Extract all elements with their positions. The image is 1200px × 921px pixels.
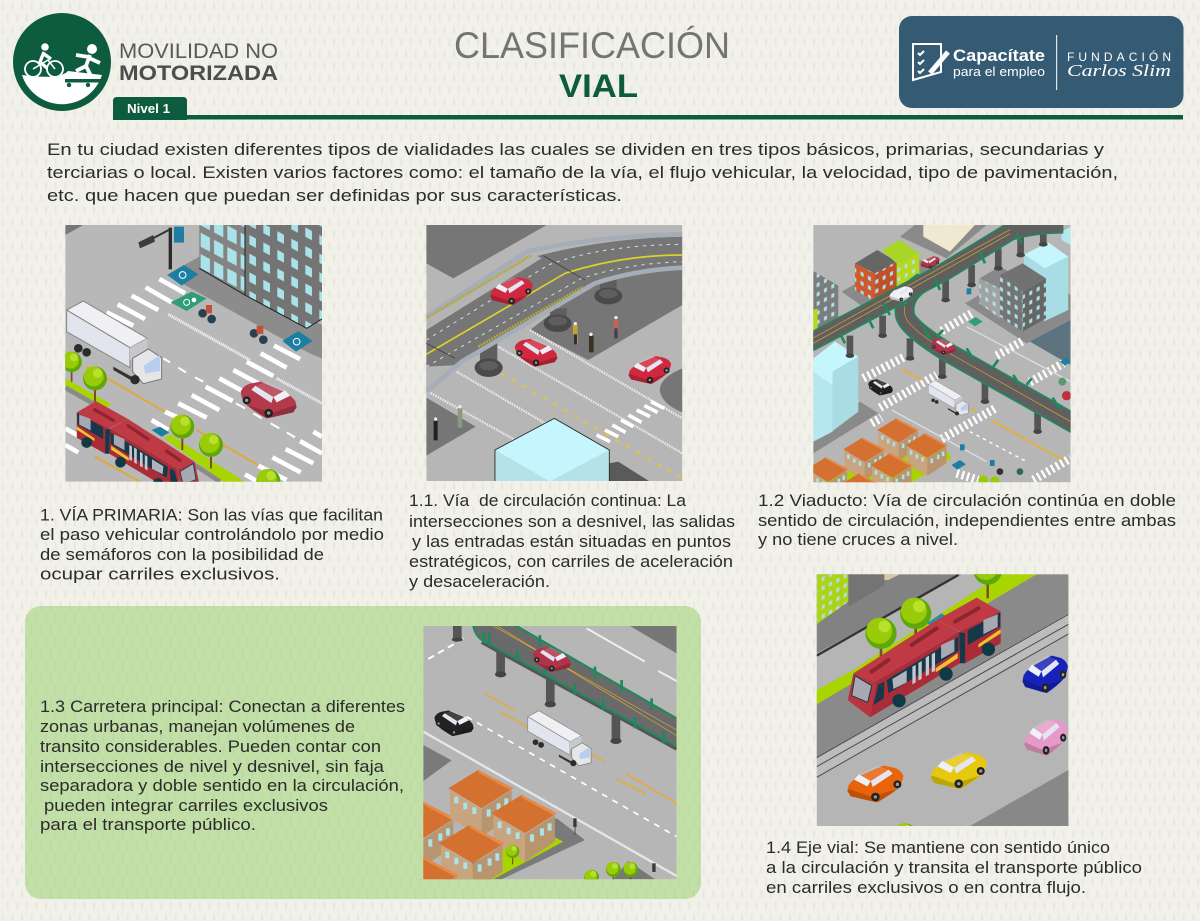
text: via primaria (40, 506, 384, 584)
blue mark on road (152, 427, 169, 437)
text: viaducto: sentido de circulación, independientes entre ambas (758, 512, 1176, 530)
text: via primaria: 1. VÍA PRIMARIA: Son las vías que facilitan (40, 506, 383, 524)
text: via primaria: de semáforos con la posibilidad de (40, 546, 324, 564)
text: via de circulacion continua: 1.1. Vía de circulación continua: La (409, 492, 687, 510)
title: VIAL (559, 68, 638, 104)
text: carretera principal: 1.3 Carretera principal: Conectan a diferentes (40, 698, 405, 716)
pillars (475, 280, 622, 377)
text: carretera principal: intersecciones de nivel y desnivel, sin faja (40, 758, 385, 776)
lots (813, 225, 1071, 453)
crosswalks (863, 313, 1071, 480)
sponsor badge (899, 16, 1184, 108)
sponsor badge: Carlos Slim (1067, 61, 1171, 80)
cyclists (198, 305, 268, 344)
road marks (423, 628, 677, 876)
sidewalk (167, 257, 322, 358)
elevated roadway (473, 626, 677, 749)
text: via primaria: el paso vehicular controlándolo por medio (40, 526, 384, 544)
lime median (817, 574, 1037, 704)
glass building (495, 418, 609, 482)
text: carretera principal: separadora y doble sentido en la circulación, (40, 777, 404, 795)
buildings (813, 225, 1071, 442)
text: carretera principal (40, 698, 405, 834)
red car (241, 382, 297, 418)
icon: checklist and pencil (913, 44, 948, 80)
logo: movilidad no motorizada (13, 13, 111, 111)
text: via de circulacion continua: intersecciones son a desnivel, las salidas (409, 513, 735, 531)
intro paragraph: etc. que hacen que puedan ser definidas por sus características. (47, 186, 622, 205)
panel: via primaria illustration (65, 225, 322, 482)
background buildings (817, 574, 900, 624)
red cars (490, 277, 671, 384)
text: carretera principal: pueden integrar carriles exclusivos (44, 797, 328, 815)
brand text (119, 40, 278, 85)
trees (865, 556, 1002, 855)
text: carretera principal: para el transporte público. (40, 816, 256, 834)
text: via de circulacion continua: estratégicos, con carriles de aceleración (409, 553, 733, 571)
brand text: MOTORIZADA (119, 62, 278, 85)
title (454, 25, 730, 104)
brand text: MOVILIDAD NO (119, 40, 278, 63)
crosswalks and lane marks (65, 279, 322, 481)
text: eje vial: en carriles exclusivos o en contra flujo. (766, 879, 1086, 897)
cars (847, 656, 1068, 802)
busway lanes (817, 574, 1068, 758)
viaduct roads (807, 224, 1077, 425)
text: via de circulacion continua: y las entradas están situadas en puntos (412, 533, 731, 551)
text: via de circulacion continua: y desaceleración. (409, 573, 550, 591)
text: viaducto: 1.2 Viaducto: Vía de circulación continúa en doble (758, 492, 1176, 510)
vehicles (868, 256, 968, 415)
panel: viaducto illustration (813, 225, 1071, 482)
panel: carretera principal background (25, 606, 701, 899)
overpass (426, 234, 682, 392)
houses (807, 418, 952, 516)
sponsor badge: para el empleo (953, 64, 1045, 79)
houses (390, 770, 656, 921)
text: viaducto: y no tiene cruces a nivel. (758, 531, 958, 549)
accessibility and bike marks (167, 265, 313, 352)
plazas (426, 225, 682, 481)
sponsor badge: Capacítate (953, 47, 1045, 65)
articulated bus (848, 598, 1001, 717)
title: CLASIFICACIÓN (454, 25, 730, 66)
text: carretera principal: zonas urbanas, manejan volúmenes de (40, 718, 355, 736)
panel: eje vial illustration (816, 574, 1068, 826)
text: via de circulacion continua (409, 492, 735, 591)
level tab and rule (113, 97, 1183, 120)
intro paragraph: En tu ciudad existen diferentes tipos de vialidades las cuales se dividen en tres tipos básicos, primarias, secundarias y (47, 140, 1105, 159)
panel: carretera principal illustration (423, 626, 677, 880)
level tab and rule: Nivel 1 (127, 101, 170, 116)
intro paragraph: terciarias o local. Existen varios factores como: el tamaño de la vía, el flujo vehicular, la velocidad, tipo de pavimentación, (47, 163, 1118, 182)
text: carretera principal: transito considerables. Pueden contar con (40, 738, 381, 756)
median (65, 378, 245, 482)
text: eje vial (766, 839, 1142, 897)
traffic signal (138, 227, 184, 269)
road lane marks (428, 330, 682, 453)
text: eje vial: a la circulación y transita el transporte público (766, 859, 1142, 877)
text: viaducto (758, 492, 1176, 549)
pillars (846, 224, 1048, 434)
sponsor badge: FUNDACIÓN (1067, 49, 1171, 64)
trees (61, 352, 280, 504)
articulated bus (77, 401, 199, 497)
pillars (452, 622, 622, 744)
intro paragraph (47, 140, 1118, 205)
pedestrians (434, 316, 618, 440)
text: via primaria: ocupar carriles exclusivos. (40, 566, 280, 584)
vehicles (434, 647, 591, 766)
panel: via de circulacion continua illustration (426, 225, 682, 481)
truck (67, 301, 162, 384)
text: eje vial: 1.4 Eje vial: Se mantiene con sentido único (766, 839, 1110, 857)
building (199, 225, 322, 328)
signs and cyclists (952, 288, 1071, 486)
